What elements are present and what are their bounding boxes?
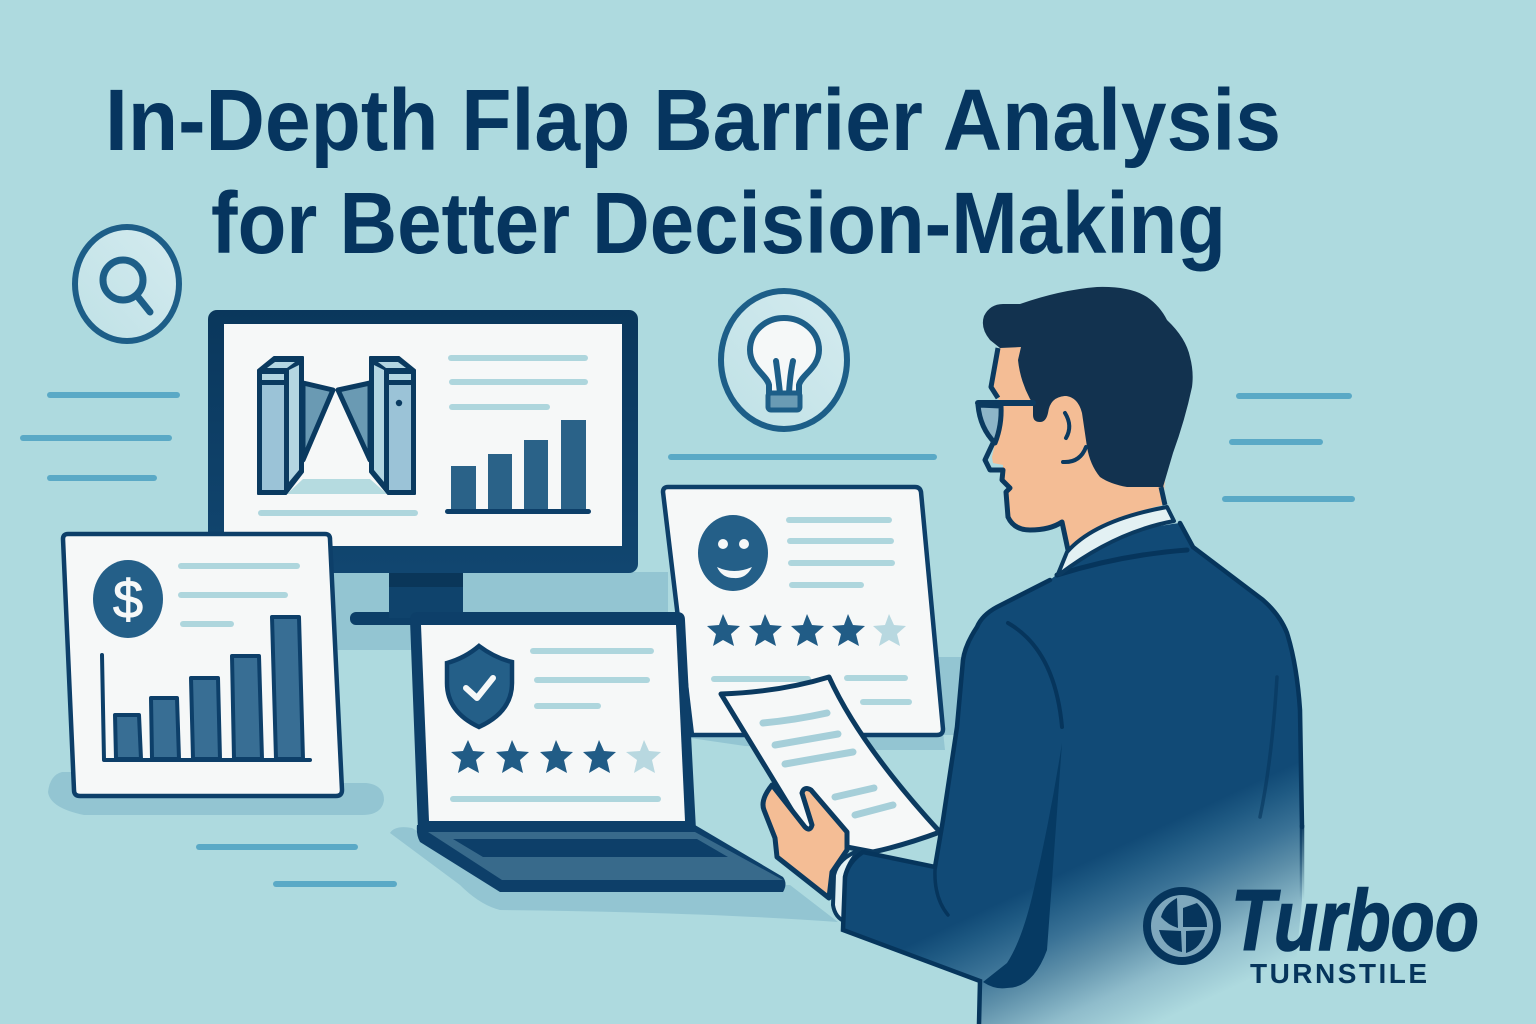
satisfaction text lines — [711, 517, 912, 705]
logo emblem — [1147, 891, 1217, 961]
neck and face — [992, 345, 1165, 550]
panel: cost card — [63, 534, 342, 796]
icon: light bulb — [721, 291, 847, 429]
icon: magnifying glass — [75, 227, 179, 341]
jacket outlines and creases — [843, 523, 1302, 1024]
document — [721, 677, 940, 852]
logo — [1147, 873, 1479, 989]
shirt collar — [1058, 507, 1174, 574]
logo wordmark: Turboo — [1231, 873, 1479, 969]
panel: satisfaction card — [663, 487, 943, 735]
hand — [763, 785, 847, 898]
figure: analyst — [721, 287, 1302, 1024]
panel: laptop — [410, 612, 786, 892]
icon: flap barrier turnstile — [258, 357, 415, 494]
icon: smiley face — [698, 515, 768, 591]
ear — [1050, 396, 1086, 470]
icon: dollar coin: $ — [113, 570, 143, 630]
title — [105, 72, 1281, 272]
decorative speed lines — [23, 395, 1352, 884]
title: for Better Decision-Making — [211, 175, 1226, 272]
monitor text lines — [448, 355, 588, 410]
jacket — [843, 523, 1302, 1024]
shirt cuff — [833, 850, 860, 922]
icon: dollar coin — [93, 560, 163, 638]
title: In-Depth Flap Barrier Analysis — [105, 72, 1281, 169]
cost text lines — [178, 563, 300, 627]
panel: monitor — [208, 310, 638, 625]
laptop text lines — [450, 648, 661, 802]
icon: shield — [447, 646, 512, 727]
star rating: satisfaction — [707, 614, 906, 646]
jacket shaded panel — [983, 743, 1062, 988]
bar chart: monitor — [445, 420, 591, 514]
desk shadows — [48, 572, 965, 922]
star rating: laptop — [451, 740, 661, 773]
logo: TURNSTILE — [1250, 958, 1427, 989]
glasses — [978, 400, 1033, 406]
bar chart: cost — [102, 617, 310, 760]
hair — [983, 287, 1193, 487]
